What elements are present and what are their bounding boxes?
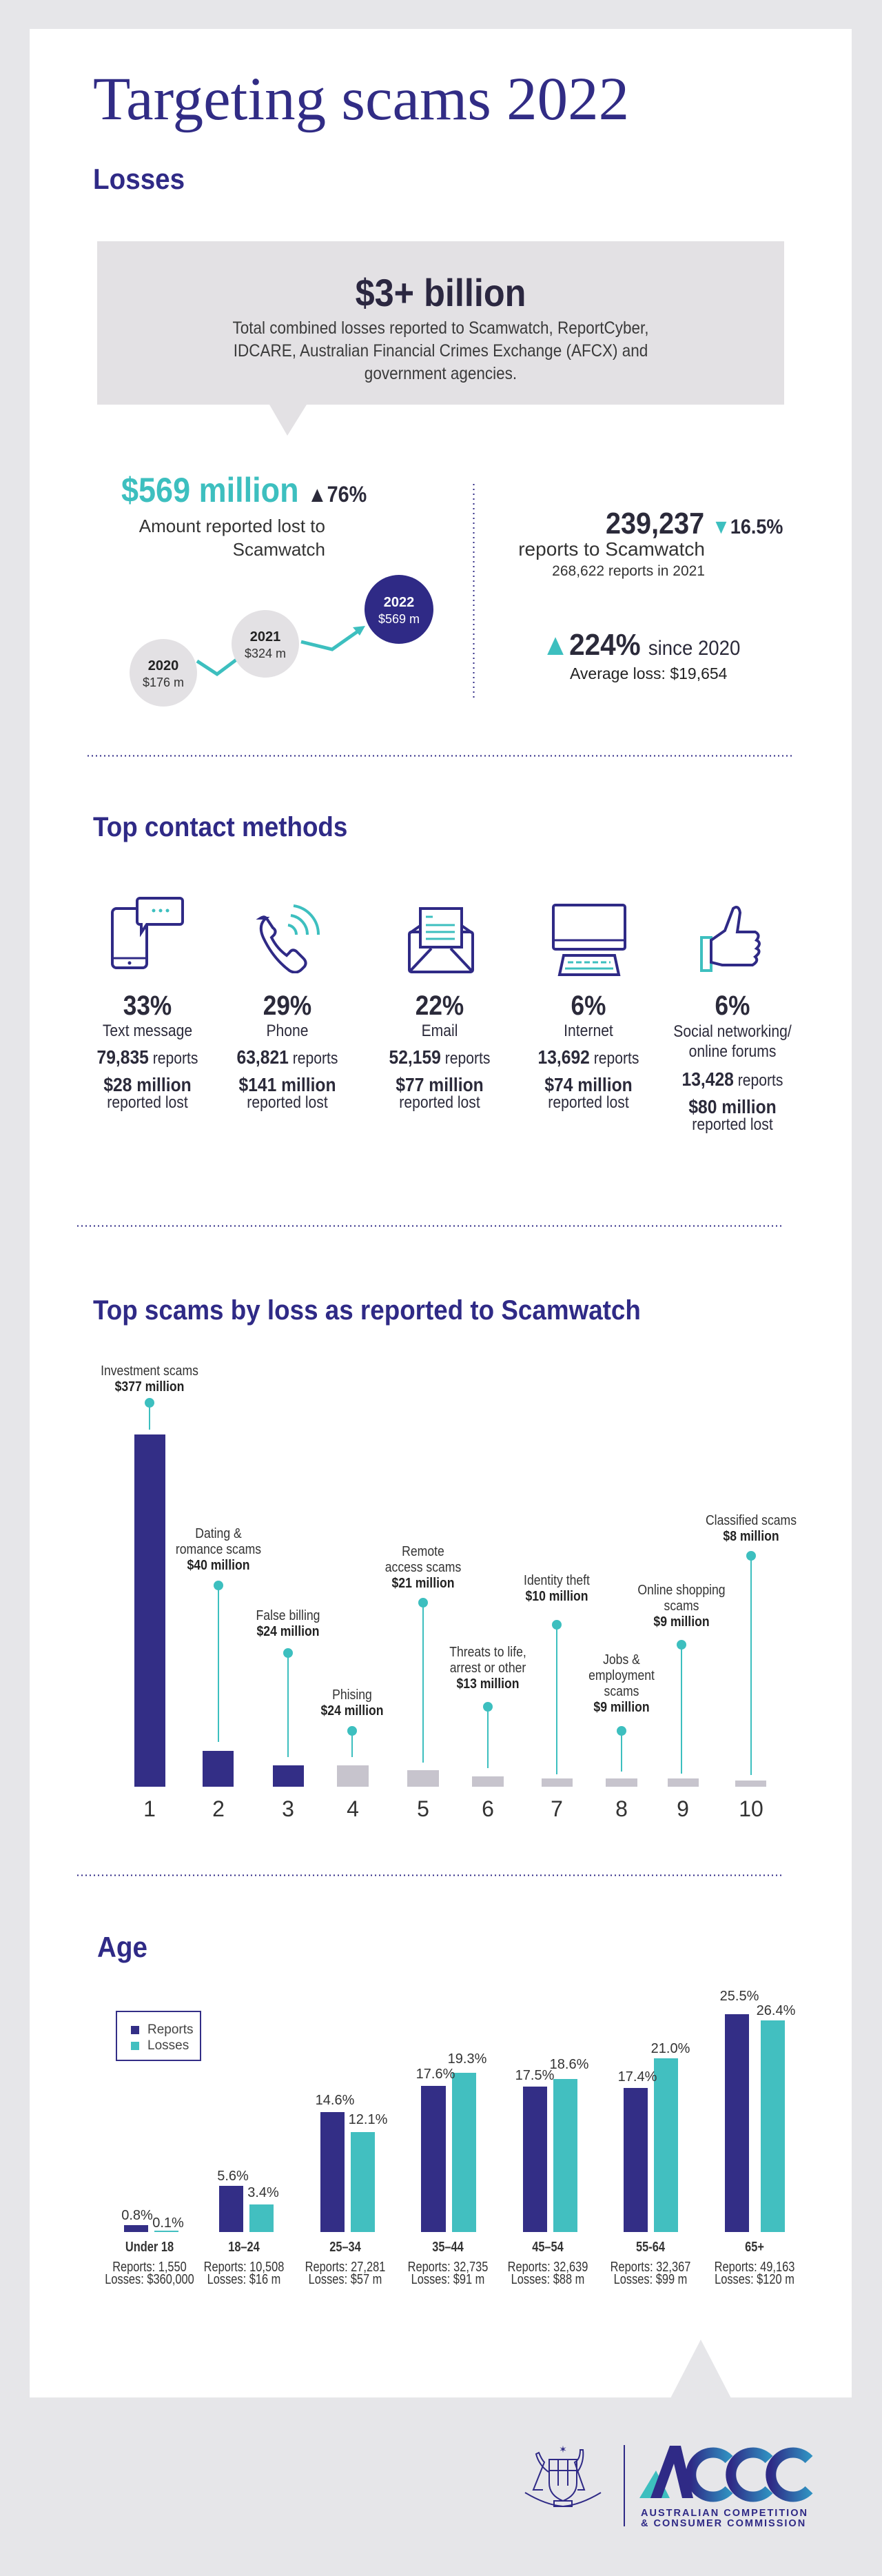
chart: yearly loss circles: $569 m	[378, 612, 420, 626]
stat: reports to Scamwatch: reports to Scamwatch	[518, 538, 705, 560]
text: Jobs &	[603, 1652, 640, 1667]
icon: email	[408, 907, 474, 973]
icon: computer	[552, 904, 626, 976]
stats: email column	[389, 991, 490, 1112]
callout: $3+ billion: Total combined losses reported to Scamwatch, ReportCyber,	[232, 318, 649, 338]
text: Reports: 32,735	[408, 2260, 488, 2275]
stat: reports to Scamwatch: 268,622 reports in 2021	[552, 563, 705, 579]
title: Targeting scams 2022	[93, 65, 629, 133]
stat: reports to Scamwatch	[518, 507, 783, 579]
text: $9 million	[653, 1614, 710, 1630]
text: $8 million	[723, 1529, 779, 1544]
stat: $569 million: Amount reported lost to	[139, 516, 325, 536]
stats: email column: Email	[422, 1022, 458, 1040]
callout: $3+ billion: IDCARE, Australian Financial Crimes Exchange (AFCX) and	[234, 341, 648, 361]
logo: ACCC	[639, 2446, 813, 2527]
callout: $3+ billion: $3+ billion	[356, 271, 526, 314]
stats: internet column: 6%	[571, 991, 606, 1021]
chart: yearly loss circles	[130, 575, 433, 707]
age category labels	[105, 2240, 194, 2287]
stats: email column: reported lost	[399, 1093, 480, 1112]
stats: contact columns: 79,835 reports	[97, 1046, 198, 1068]
text: 19.3%	[448, 2051, 486, 2067]
stats: social column: Social networking/	[673, 1022, 792, 1041]
text: arrest or other	[450, 1661, 526, 1676]
text: scams	[664, 1599, 699, 1614]
text: $13 million	[457, 1676, 519, 1692]
text: 26.4%	[757, 2003, 795, 2018]
stat: 224% since 2020: Average loss: $19,654	[570, 665, 727, 682]
age value labels: 0.8%	[121, 2208, 153, 2223]
legend: Reports	[147, 2022, 194, 2037]
text: Losses: $16 m	[207, 2272, 280, 2287]
text: 3.4%	[247, 2185, 279, 2200]
text: Remote	[402, 1544, 444, 1559]
axis numbers: 1	[143, 1796, 156, 1821]
stats: contact columns: Text message	[103, 1022, 192, 1040]
heading: Top contact methods: Top contact methods	[93, 812, 347, 842]
text: Losses: $57 m	[309, 2272, 382, 2287]
bar chart: top scams	[134, 1398, 766, 1787]
bar labels: $377 million	[115, 1379, 184, 1395]
stat: $569 million	[121, 471, 367, 560]
age category labels: Losses: $360,000	[105, 2272, 194, 2287]
text: Classified scams	[706, 1513, 797, 1528]
text: Losses: $99 m	[614, 2272, 687, 2287]
text: 3	[282, 1796, 294, 1821]
text: Losses: $88 m	[511, 2272, 584, 2287]
logo: ACCC: AUSTRALIAN COMPETITION	[641, 2508, 808, 2519]
callout: $3+ billion: government agencies.	[365, 364, 517, 383]
text: 25.5%	[720, 1989, 759, 2004]
text: Losses: $91 m	[411, 2272, 484, 2287]
text: romance scams	[176, 1542, 261, 1557]
text: 4	[347, 1796, 359, 1821]
text: Reports: 10,508	[204, 2260, 284, 2275]
stats: contact columns: $28 million	[103, 1074, 192, 1095]
text: 12.1%	[349, 2112, 387, 2127]
stats: social column: 6%	[715, 991, 750, 1021]
stats: internet column: 13,692 reports	[538, 1046, 639, 1068]
text: Reports: 32,639	[508, 2260, 588, 2275]
stats: social column: reported lost	[692, 1115, 773, 1134]
text: 17.4%	[618, 2069, 657, 2085]
stats: phone column: Phone	[266, 1022, 309, 1040]
text: 2	[212, 1796, 225, 1821]
bar labels	[101, 1363, 198, 1395]
stats: contact columns: 33%	[123, 991, 172, 1021]
bottom notch triangle	[671, 2340, 730, 2397]
stats: internet column: $74 million	[544, 1074, 633, 1095]
age category labels: Under 18	[125, 2240, 174, 2255]
text: $24 million	[321, 1703, 383, 1718]
text: False billing	[256, 1608, 320, 1623]
stats: phone column: 29%	[263, 991, 311, 1021]
stats: phone column: 63,821 reports	[237, 1046, 338, 1068]
bar chart: age	[124, 2014, 785, 2232]
text: Identity theft	[524, 1573, 590, 1588]
text: 0.1%	[152, 2215, 184, 2231]
text: 9	[677, 1796, 689, 1821]
text: 5.6%	[217, 2169, 249, 2184]
stats: social column: 13,428 reports	[682, 1068, 783, 1090]
chart: yearly loss circles: 2021	[250, 629, 280, 645]
heading: Losses: Losses	[93, 163, 185, 195]
age category labels: Reports: 1,550	[112, 2260, 187, 2275]
text: scams	[604, 1684, 639, 1699]
chart: yearly loss circles: 2020	[148, 658, 178, 673]
text: $24 million	[257, 1624, 319, 1639]
stats: social column	[673, 991, 792, 1134]
text: 55-64	[636, 2240, 665, 2255]
text: 18–24	[228, 2240, 260, 2255]
text: 35–44	[432, 2240, 464, 2255]
text: $40 million	[187, 1558, 249, 1573]
bar labels: Investment scams	[101, 1363, 198, 1379]
heading: Top scams: Top scams by loss as reported to Scamwatch	[93, 1295, 641, 1326]
stats: contact columns	[97, 991, 198, 1112]
stat: $569 million: $569 million ▲76%	[121, 471, 367, 509]
text: 45–54	[532, 2240, 564, 2255]
text: Reports: 32,367	[611, 2260, 690, 2275]
text: 21.0%	[651, 2041, 690, 2056]
text: Losses: $120 m	[715, 2272, 794, 2287]
stats: internet column: Internet	[564, 1022, 613, 1040]
text: access scams	[385, 1560, 461, 1575]
stats: social column: $80 million	[688, 1096, 777, 1117]
text: Reports: 27,281	[305, 2260, 385, 2275]
text: 10	[739, 1796, 763, 1821]
text: Dating &	[195, 1526, 242, 1541]
text: 6	[482, 1796, 494, 1821]
icon: text message	[111, 897, 184, 969]
legend	[116, 2011, 201, 2061]
stats: phone column: reported lost	[247, 1093, 328, 1112]
text: 65+	[745, 2240, 764, 2255]
text: $21 million	[392, 1576, 454, 1591]
stats: contact columns: reported lost	[107, 1093, 188, 1112]
stats: email column: 52,159 reports	[389, 1046, 490, 1068]
legend: Losses	[147, 2038, 189, 2053]
stats: phone column	[237, 991, 338, 1112]
stat: 224% since 2020: ▲224% since 2020	[542, 628, 740, 662]
text: 17.6%	[416, 2067, 455, 2082]
text: 14.6%	[316, 2093, 354, 2108]
icon: thumbs up	[700, 906, 761, 972]
chart: yearly loss circles: 2022	[384, 595, 414, 610]
text: Online shopping	[637, 1583, 726, 1598]
chart: yearly loss circles: $324 m	[245, 647, 286, 660]
text: 18.6%	[550, 2057, 588, 2072]
chart: yearly loss circles: $176 m	[143, 676, 184, 689]
text: Phising	[332, 1687, 372, 1703]
stats: phone column: $141 million	[238, 1074, 336, 1095]
stats: email column: 22%	[416, 991, 464, 1021]
stat: $569 million: Scamwatch	[233, 539, 325, 560]
text: 25–34	[329, 2240, 361, 2255]
text: Threats to life,	[449, 1645, 526, 1660]
text: Reports: 49,163	[715, 2260, 794, 2275]
stat: 224% since 2020	[542, 628, 740, 682]
icon: phone	[256, 904, 320, 973]
text: $10 million	[526, 1589, 588, 1604]
stat: reports to Scamwatch: 239,237 ▼16.5%	[606, 507, 783, 540]
text: employment	[588, 1668, 655, 1683]
stats: social column: online forums	[689, 1042, 776, 1061]
stats: internet column: reported lost	[548, 1093, 629, 1112]
stats: email column: $77 million	[396, 1074, 484, 1095]
text: 17.5%	[515, 2068, 554, 2083]
callout: $3+ billion	[97, 241, 784, 436]
heading: Age: Age	[97, 1931, 147, 1963]
text: $9 million	[593, 1700, 650, 1715]
stats: internet column	[538, 991, 639, 1112]
text: 5	[417, 1796, 429, 1821]
icon: coat of arms	[525, 2444, 601, 2507]
text: 8	[615, 1796, 628, 1821]
text: 7	[551, 1796, 563, 1821]
